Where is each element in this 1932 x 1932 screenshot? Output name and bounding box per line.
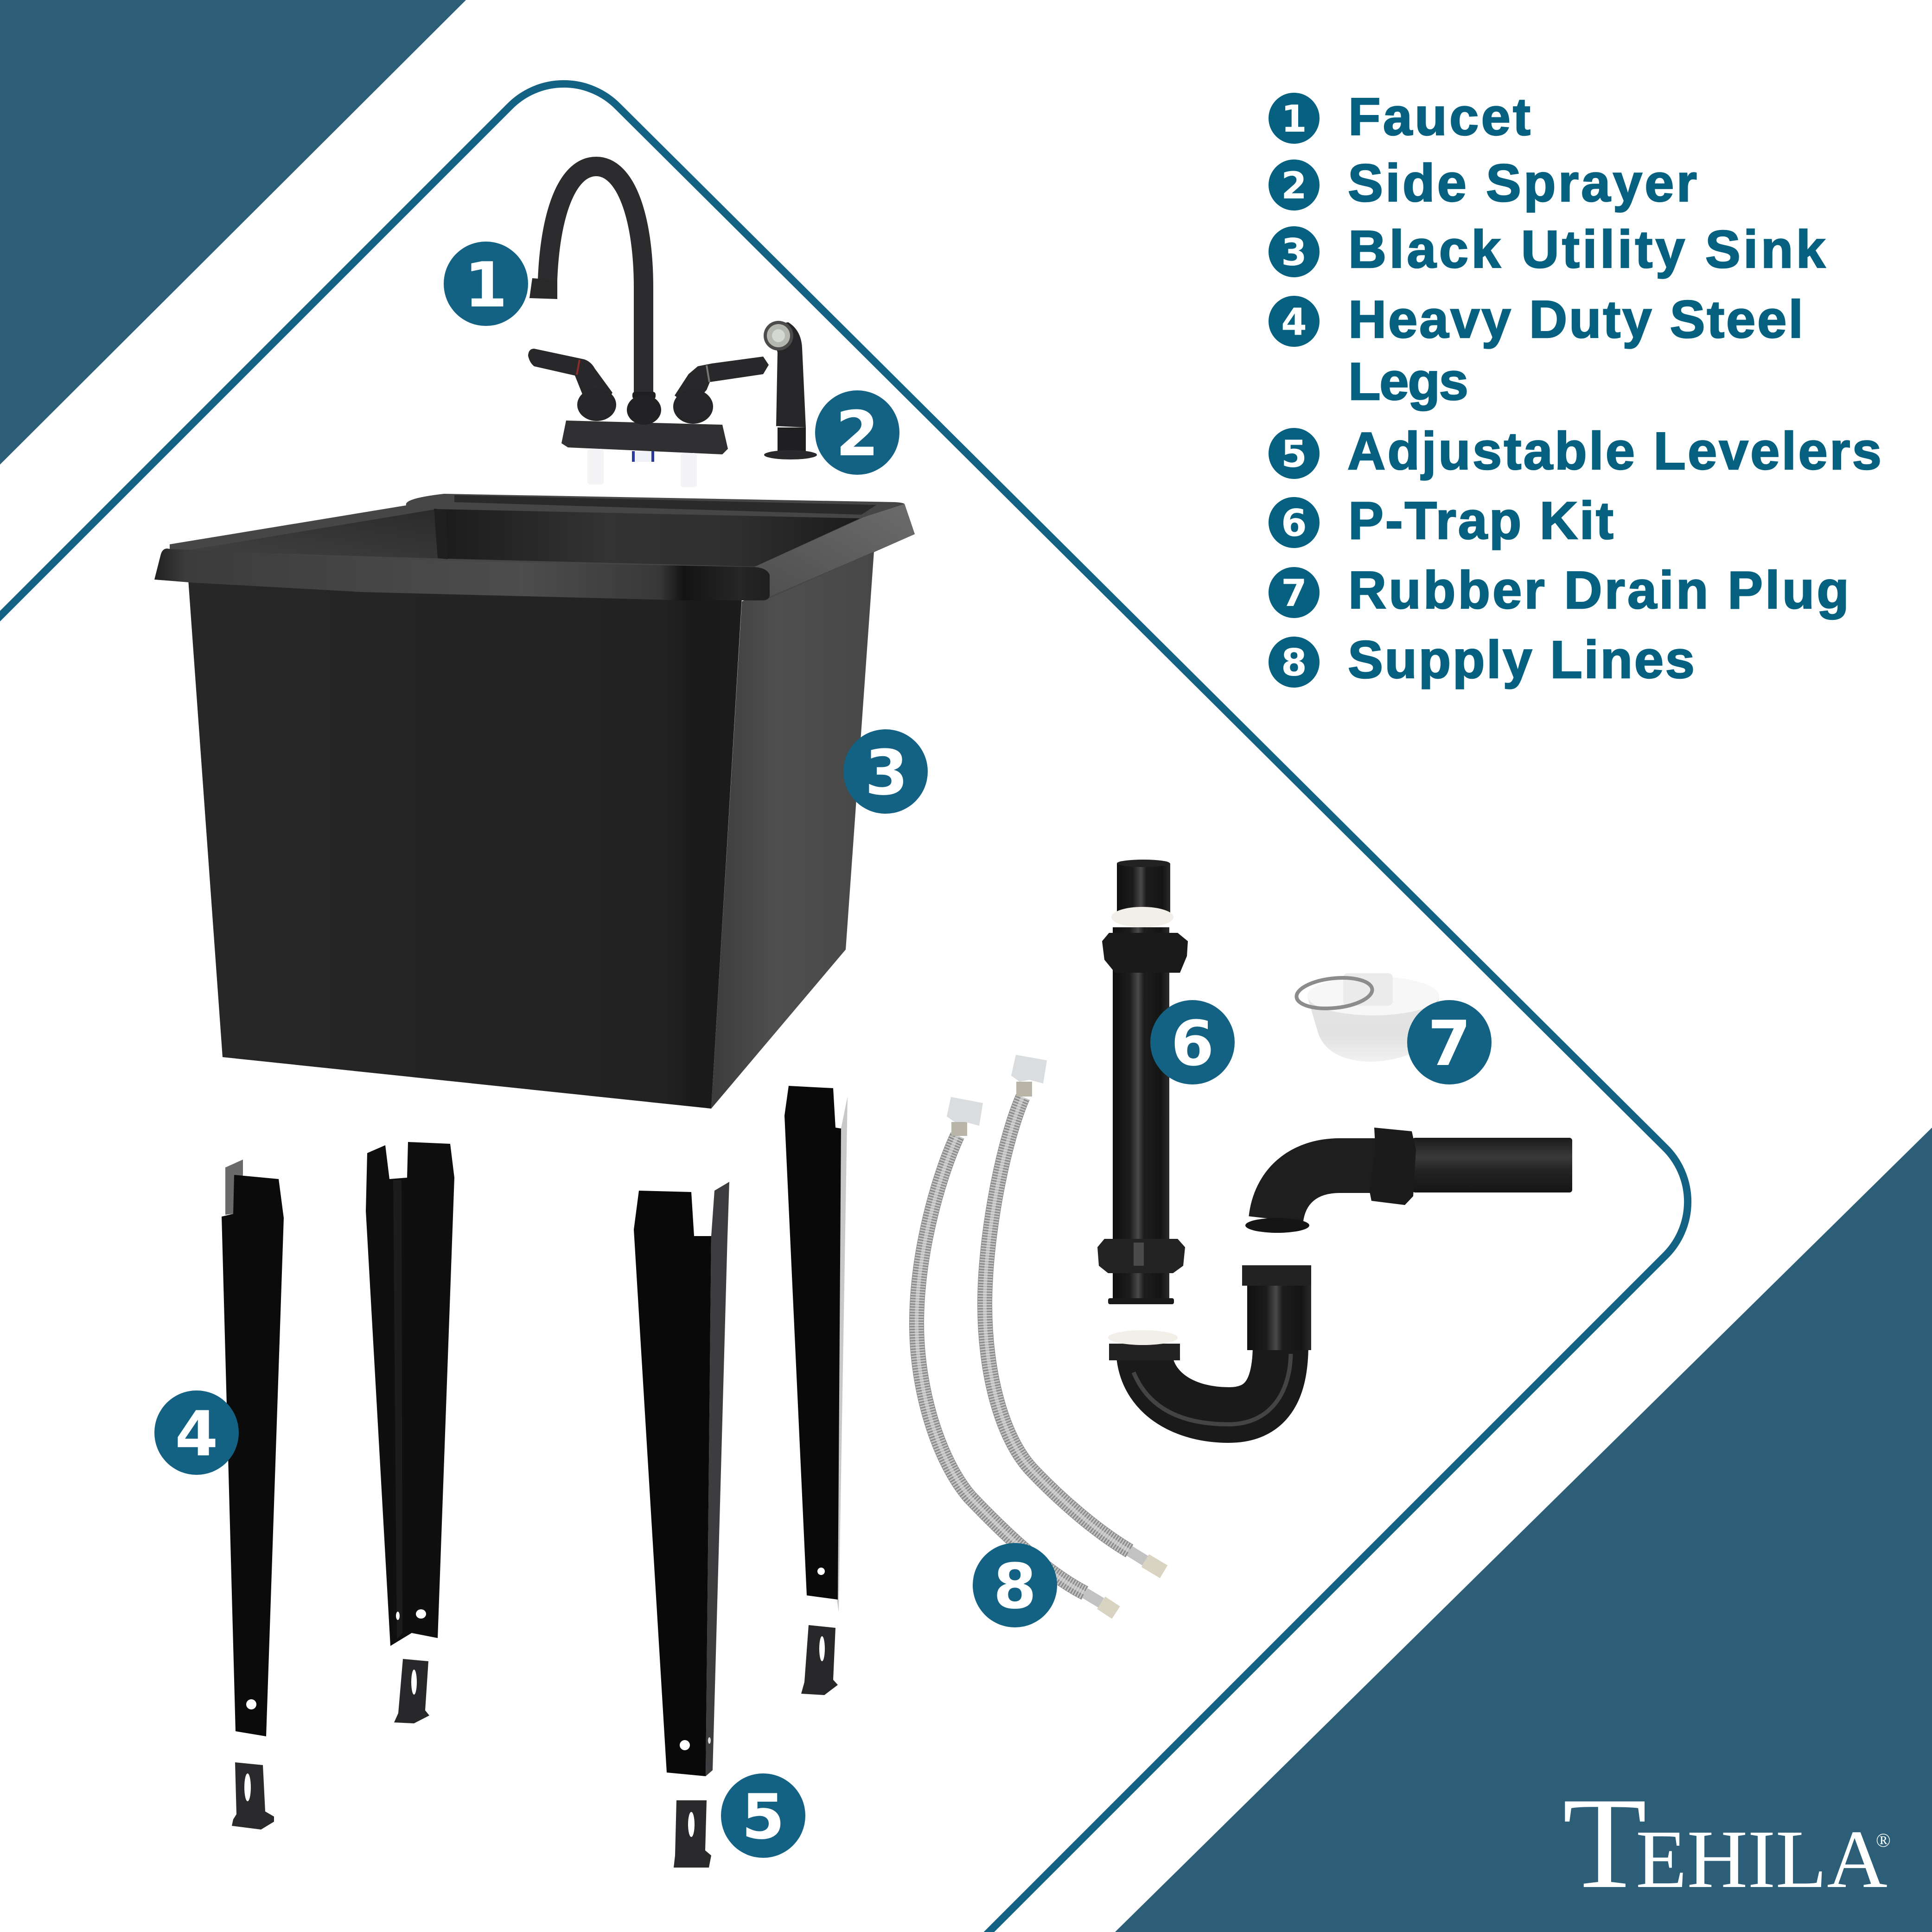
upper slip nut [1102,933,1188,973]
faucet base plate [561,421,728,454]
left handle [528,349,616,421]
legend item 4: 4 [1281,300,1307,344]
brand logo: ® [1876,1830,1891,1851]
callout 6: 6 [1171,1007,1214,1080]
trap bend highlight [1134,1354,1291,1424]
part: side sprayer [764,321,817,459]
callout 7 [1407,1000,1492,1084]
plug body [1307,997,1439,1062]
plug ring [1295,975,1374,1012]
callout 1 [444,242,528,326]
part: rubber drain plug [1295,973,1439,1062]
callout 5 [721,1773,805,1858]
sink front face [188,580,742,1109]
legend item 5: 5 [1281,433,1307,476]
tailpiece flange [1108,1298,1174,1304]
legend item 7: 7 [1281,572,1307,615]
part: supply lines [917,1055,1164,1613]
legend list [1269,88,1881,689]
leg two [366,1142,454,1646]
plug top [1307,976,1439,1015]
sink back inner wall [437,509,860,567]
callout 2 [815,390,899,475]
legend item 1: 1 [1281,97,1307,140]
lower slip nut [1097,1239,1185,1273]
trap bend [1144,1317,1281,1415]
legend item 8: Supply Lines [1348,631,1695,689]
tailpiece main tube [1113,927,1169,1301]
callout 6 [1150,1000,1235,1084]
part: faucet [528,166,769,487]
elbow bend [1276,1166,1386,1219]
right rim [754,504,915,597]
supply line left hose [917,1135,1085,1593]
leg three [634,1182,729,1776]
callout 8 [973,1543,1057,1627]
legend item 4: Heavy Duty Steel [1348,290,1803,349]
elbow slip nut [1370,1128,1416,1205]
part: steel legs [222,1086,848,1776]
bottom-right corner triangle [1115,1128,1932,1932]
elbow horizontal tube [1412,1138,1572,1192]
right hose fittings [1011,1055,1164,1572]
legend item 3: 3 [1281,231,1307,274]
callout 1: 1 [464,249,508,321]
top-left corner triangle [0,0,466,465]
leveler one [232,1762,274,1830]
sink rim top [170,494,915,598]
sprayer body [770,322,806,427]
legend item 3: Black Utility Sink [1348,220,1826,279]
interior corner rib [434,509,448,559]
supply stems [587,449,604,485]
brand logo: T [1562,1771,1647,1915]
plug stem [1343,973,1393,1006]
trap socket [1247,1284,1311,1350]
legend item 1: Faucet [1348,88,1530,147]
left hose fittings [947,1097,1116,1613]
legend item 6: 6 [1281,502,1307,545]
part: P-trap kit [1097,860,1572,1424]
white washer [1111,907,1173,927]
leg one [222,1160,284,1736]
legend item 8: 8 [1281,641,1307,684]
brand logo [1562,1771,1891,1915]
sink left inner wall [185,509,447,559]
legend item 6: P-Trap Kit [1348,491,1613,550]
legend item 4 [1269,290,1803,411]
handle colour rings [577,360,580,375]
callout 4: 4 [175,1398,218,1470]
sprayer flange [764,450,817,459]
legend item 2: Side Sprayer [1348,154,1697,213]
part: black utility sink [154,494,915,1109]
legend item 4: Legs [1348,352,1468,411]
legend item 5: Adjustable Levelers [1347,422,1881,481]
callout 4 [154,1390,239,1475]
faucet outlet [529,278,557,299]
sink side face [711,552,874,1109]
faucet spout [548,166,644,399]
brand logo: EHILA [1636,1813,1887,1905]
trap washer [1108,1330,1178,1345]
part: adjustable levelers [232,1625,838,1868]
legend item 2: 2 [1281,164,1307,207]
callout 3: 3 [865,737,908,809]
callout 3 [843,729,928,814]
tailpiece upper [1117,860,1170,921]
front rim [154,548,770,600]
legend item 7: Rubber Drain Plug [1348,561,1849,620]
supply line right hose [985,1097,1129,1551]
back rim channel [454,495,876,515]
leg four [784,1086,848,1612]
leveler four [801,1625,838,1695]
trap thread [1109,1344,1180,1360]
leveler two [394,1659,429,1723]
elbow flange [1245,1218,1309,1233]
callout 8: 8 [993,1550,1037,1623]
leveler three [674,1800,711,1868]
faucet collar [627,392,661,425]
right handle [673,357,769,424]
legend item 1 [1269,88,1530,147]
sprayer base [778,427,806,453]
callout 7: 7 [1428,1007,1471,1080]
socket thread [1242,1265,1311,1286]
callout 2: 2 [835,398,879,470]
sprayer head [764,321,793,351]
callout 5: 5 [741,1781,785,1853]
